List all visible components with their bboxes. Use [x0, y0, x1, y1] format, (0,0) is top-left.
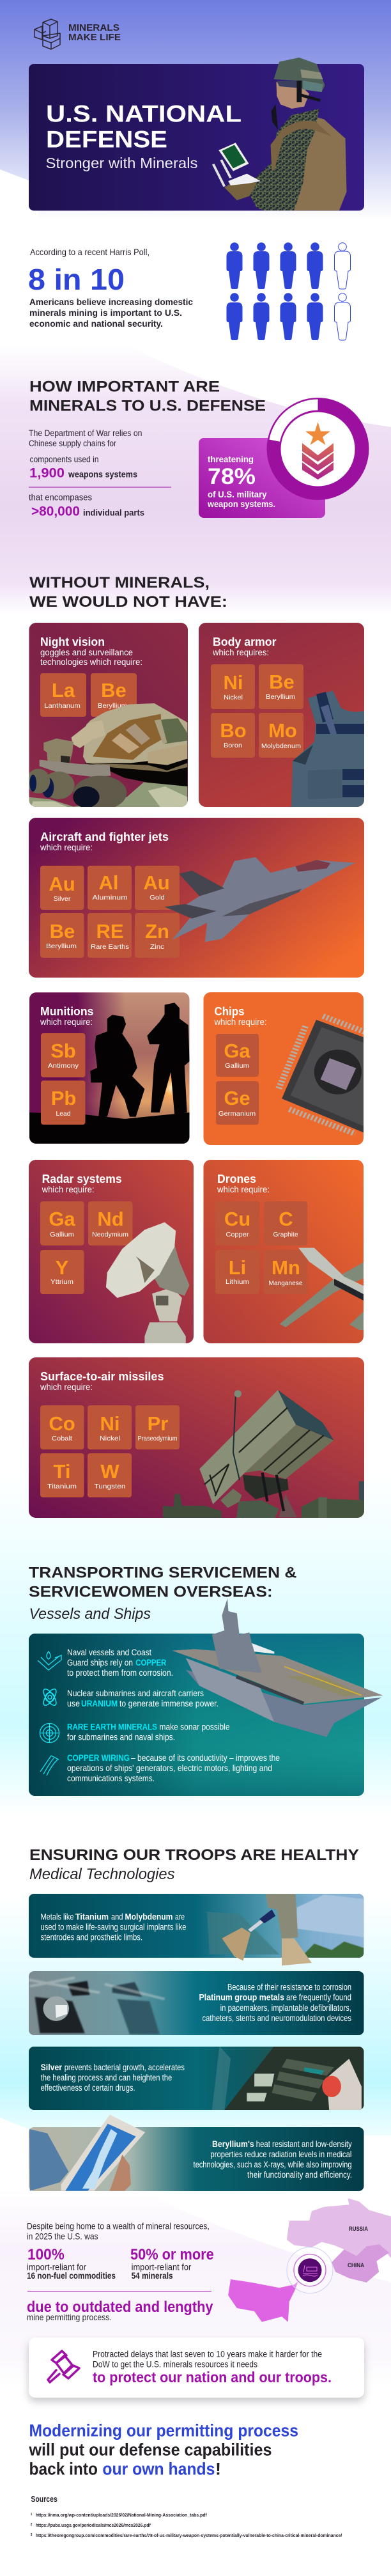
- stat: 100%: import-reliant for: [27, 2263, 86, 2272]
- heading: ensuring troops healthy: [29, 1846, 359, 1883]
- panel: platinum group metals: Platinum group metals: [199, 1993, 284, 2002]
- sources: https://nma.org/wp-content/uploads/2026/02/National-Mining-Association_tabs.pdf: [36, 2513, 207, 2518]
- photo: fighter jet: [165, 857, 355, 942]
- element: Li: Lithium: [226, 1278, 249, 1286]
- element: W: [88, 1453, 132, 1497]
- callout: protracted delays: Protracted delays that last seven to 10 years make it harder for the: [93, 2350, 322, 2359]
- text block: supply chain stats: 1,900: [29, 466, 65, 481]
- text block: supply chain stats: that encompases: [29, 493, 92, 503]
- panel: night vision: goggles and surveillance: [40, 648, 133, 657]
- page background: white wedge: [0, 169, 38, 221]
- stat: 50% or more: 54 minerals: [132, 2270, 173, 2281]
- text block: supply chain stats: Chinese supply chains for: [29, 439, 116, 448]
- heading: without minerals: [29, 574, 227, 611]
- panel: silver: the healing process and can heighten the: [41, 2073, 172, 2082]
- item: copper wiring: communications systems.: [67, 1774, 155, 1783]
- text block: supply chain stats: [29, 428, 171, 519]
- element: C: [264, 1201, 307, 1245]
- element: W: W: [100, 1460, 119, 1483]
- heading: how important: [29, 379, 266, 415]
- element: Cu: Copper: [226, 1231, 249, 1238]
- stat: 8 in 10: 8 in 10: [28, 263, 125, 296]
- panel: hero: DEFENSE: [46, 127, 167, 153]
- element: Mn: [264, 1250, 307, 1294]
- element: Nd: Neodymium: [92, 1231, 128, 1238]
- panel: hero: [29, 58, 364, 211]
- element: Ga: Ga: [224, 1040, 250, 1062]
- soldier with drone controller: [213, 58, 347, 210]
- stat: 50% or more: import-reliant for: [132, 2263, 192, 2272]
- sources: 3: [31, 2533, 33, 2537]
- text block: Harris Poll: economic and national security.: [29, 318, 163, 329]
- element: Ti: [40, 1453, 84, 1497]
- closing statement: !: [215, 2460, 221, 2479]
- element: Ni: [88, 1405, 132, 1449]
- icon: chevrons: [302, 443, 334, 480]
- element: RE: RE: [96, 920, 124, 942]
- panel: titanium and molybdenum: used to make life-saving surgical implants like: [41, 1923, 187, 1932]
- panel: surface-to-air missiles: [29, 1357, 365, 1518]
- panel: titanium and molybdenum: and: [111, 1912, 123, 1922]
- element: Ni: [211, 664, 255, 709]
- element: Be: [259, 664, 303, 709]
- item: rare earths: RARE EARTH MINERALS: [67, 1722, 157, 1732]
- stat: 50% or more: [130, 2246, 214, 2281]
- sources: 2: [31, 2523, 33, 2527]
- panel: night vision: Night vision: [40, 636, 105, 648]
- heading: transporting servicemen: SERVICEWOMEN OVERSEAS:: [29, 1584, 273, 1601]
- panel: body armor: which requires:: [212, 648, 269, 657]
- icon: gavel: [48, 2351, 79, 2382]
- panel: platinum group metals: Because of their resistance to corrosion: [227, 1983, 351, 1992]
- element: Au gold: Gold: [150, 894, 165, 902]
- heading: ensuring troops healthy: ENSURING OUR TROOPS ARE HEALTHY: [29, 1846, 359, 1864]
- sources: 1: [31, 2513, 33, 2517]
- element: Pb: Lead: [56, 1110, 71, 1118]
- stat: 100%: 100%: [27, 2246, 65, 2263]
- element: Au silver: Silver: [54, 895, 71, 903]
- element: Be: [91, 673, 137, 717]
- panel: drones: Drones: [217, 1173, 256, 1185]
- element: Ni: Nickel: [100, 1435, 120, 1442]
- text block: Harris Poll: minerals mining is important to U.S.: [29, 308, 182, 318]
- subtitle: Stronger with Minerals: [46, 155, 198, 171]
- element: Pb: Pb: [51, 1087, 76, 1109]
- panel: chips: [203, 992, 367, 1145]
- element: Ga: Ga: [49, 1208, 75, 1230]
- callout: threatening 78%: 78%: [208, 464, 256, 489]
- item: copper: [38, 1648, 173, 1678]
- poll statement: Americans believe increasing domestic: [29, 297, 193, 307]
- element: Pr: [135, 1405, 180, 1449]
- heading: transporting servicemen: [29, 1565, 296, 1623]
- element: Ga: [40, 1201, 84, 1245]
- panel: aircraft and fighter jets: [29, 818, 364, 978]
- item: rare earths: for submarines and naval ships.: [67, 1733, 175, 1742]
- element: Y: [40, 1250, 84, 1294]
- element: Mo: Molybdenum: [261, 742, 301, 750]
- panel: silver: Silver: [41, 2063, 63, 2072]
- element: Bo: Boron: [224, 742, 242, 749]
- item: uranium: [41, 1687, 218, 1708]
- photo: radar dish: [106, 1222, 190, 1343]
- callout: threatening 78%: [199, 438, 325, 518]
- logo: MAKE LIFE: [68, 32, 121, 43]
- element: C: Graphite: [273, 1231, 298, 1238]
- photo: chest x-ray with pacemaker: [29, 1978, 165, 2034]
- element: Sb: Antimony: [48, 1062, 79, 1070]
- element: Be: Be: [101, 679, 126, 701]
- closing statement: will put our defense capabilities: [29, 2440, 272, 2460]
- panel: body armor: Body armor: [213, 636, 276, 648]
- element: Sb: Sb: [50, 1040, 76, 1062]
- element: W: Tungsten: [95, 1483, 126, 1490]
- title: U.S. NATIONAL: [46, 101, 241, 127]
- panel: radar systems: Radar systems: [42, 1173, 122, 1185]
- stat: 50% or more: 50% or more: [130, 2246, 214, 2263]
- text block: import reliance: Despite being home to a wealth of mineral resources,: [27, 2222, 210, 2231]
- element: Ge: [216, 1081, 259, 1125]
- photo: drone: [280, 1248, 367, 1330]
- element: Co: Co: [49, 1412, 75, 1435]
- element: Mn: Manganese: [268, 1279, 303, 1287]
- item: uranium: to generate immense power.: [119, 1699, 218, 1708]
- item: copper: COPPER: [135, 1658, 167, 1667]
- item: rare earths: make sonar possible: [160, 1722, 230, 1732]
- donut chart: 78 percent with rank insignia: [267, 398, 369, 500]
- label: Russia: RUSSIA: [349, 2226, 368, 2232]
- element: Ga: Gallium: [50, 1231, 74, 1238]
- panel: silver: [29, 2046, 364, 2110]
- element: Au gold: Au: [143, 871, 170, 894]
- text block: supply chain stats: components used in: [29, 455, 98, 464]
- logo text: MINERALS: [68, 22, 119, 33]
- panel: chips: Chips: [215, 1005, 244, 1018]
- callout: threatening 78%: of U.S. military: [208, 489, 267, 499]
- heading: transporting servicemen: TRANSPORTING SERVICEMEN &: [29, 1565, 296, 1582]
- callout: protracted delays: to protect our nation and our troops.: [93, 2369, 332, 2385]
- heading: without minerals: WE WOULD NOT HAVE:: [29, 593, 227, 611]
- element: Y: Y: [56, 1256, 69, 1279]
- heading: how important: MINERALS TO U.S. DEFENSE: [29, 398, 266, 415]
- panel: night vision: technologies which require:: [40, 657, 142, 667]
- element: Bo: [211, 713, 255, 758]
- item: copper wiring: COPPER WIRING: [67, 1753, 130, 1763]
- element: Al: Aluminum: [92, 894, 128, 902]
- item: copper wiring: – because of its conductivity – improves the: [131, 1753, 280, 1763]
- photo: sunset silhouettes: [29, 992, 191, 1144]
- subheading: Medical Technologies: [29, 1866, 175, 1883]
- item: copper: Guard ships rely on: [67, 1658, 133, 1667]
- element: Li: Li: [229, 1256, 246, 1279]
- panel: titanium and molybdenum: Molybdenum: [125, 1912, 172, 1922]
- page background: purple section: [0, 345, 391, 615]
- callout: threatening 78%: weapon systems.: [207, 499, 275, 509]
- element: Au silver: Au: [49, 873, 75, 895]
- text block: supply chain stats: individual parts: [83, 508, 144, 518]
- label: China: CHINA: [348, 2262, 364, 2268]
- world map: shipping from Russia and China to the U.S.: [228, 2198, 391, 2322]
- element: Zn: [135, 913, 180, 958]
- panel: platinum group metals: catheters, stents and neuromodulation devices: [202, 2013, 351, 2023]
- icon: sonar: [40, 1724, 59, 1743]
- element: Ge: Ge: [224, 1087, 250, 1109]
- icon: cargo ship marker: [287, 2247, 333, 2293]
- panel: platinum group metals: in pacemakers, implantable defibrillators,: [220, 2003, 351, 2013]
- sources: https://theoregongroup.com/commodities/rare-earths/78-of-us-military-weapon-systems-potentially-vulnerable-to-china-critical-mineral-dominance/: [36, 2534, 342, 2538]
- closing statement: Modernizing our permitting process: [29, 2421, 298, 2440]
- element: Be: Be: [269, 671, 295, 693]
- element: Nd: Nd: [97, 1208, 124, 1230]
- element: Mn: Mn: [272, 1256, 300, 1279]
- map shapes: [228, 2198, 391, 2322]
- element: Zn: Zinc: [150, 943, 164, 951]
- element: Ni: Ni: [224, 671, 243, 694]
- panel: platinum group metals: [29, 1971, 364, 2035]
- element: Pr: Praseodymium: [138, 1435, 178, 1442]
- element: Y: Yttrium: [50, 1278, 73, 1286]
- photo: missile launcher: [163, 1390, 365, 1518]
- closing statement: our own hands: [102, 2460, 215, 2479]
- page background: white curve: [0, 320, 391, 427]
- element: Sb: [41, 1033, 86, 1077]
- panel: munitions: Munitions: [40, 1005, 93, 1018]
- panel: radar systems: [29, 1160, 194, 1343]
- element: C: C: [279, 1208, 293, 1230]
- element: Ga: [216, 1034, 259, 1077]
- text block: import reliance: in 2025 the U.S. was: [27, 2232, 98, 2242]
- panel: titanium and molybdenum: stentrodes and prosthetic limbs.: [41, 1933, 142, 1942]
- text block: Harris Poll: [28, 247, 193, 329]
- element: Ga: Gallium: [225, 1062, 249, 1070]
- panel: vessels and ships: [29, 1598, 383, 1796]
- text block: supply chain stats: The Department of War relies on: [29, 428, 142, 438]
- closing statement: [29, 2421, 298, 2479]
- text block: import reliance: mine permitting process.: [27, 2313, 112, 2322]
- element: Be: Beryllium: [266, 693, 295, 701]
- element: Ti: Titanium: [47, 1483, 77, 1490]
- item: copper: Naval vessels and Coast: [67, 1648, 151, 1657]
- photo: microchip: [278, 1016, 367, 1134]
- page background: lilac section: [0, 2190, 391, 2385]
- panel: munitions: [29, 992, 191, 1144]
- panel: beryllium: [29, 2114, 364, 2191]
- panel: platinum group metals: are frequently found: [286, 1993, 351, 2002]
- element: Ti: Ti: [54, 1460, 70, 1483]
- panel: radar systems: which require:: [42, 1185, 95, 1194]
- panel: chips: which require:: [214, 1017, 267, 1027]
- element: RE: [88, 913, 132, 958]
- icon: star: [305, 422, 330, 445]
- element: Nd: [88, 1201, 133, 1245]
- photo: amphibious assault ship: [172, 1598, 383, 1737]
- page background: top blue gradient: [0, 0, 391, 221]
- panel: munitions: which require:: [40, 1017, 93, 1027]
- text block: supply chain stats: weapons systems: [68, 469, 137, 480]
- element: Be: [40, 913, 84, 958]
- sources: Sources: [31, 2494, 57, 2504]
- item: copper wiring: operations of ships' generators, electric motors, lighting and: [67, 1763, 272, 1773]
- element: Al: [88, 866, 132, 910]
- item: rare earths: [40, 1722, 230, 1743]
- panel: beryllium: Beryllium's: [212, 2139, 254, 2149]
- photo: tablet with x-ray: [29, 2114, 145, 2191]
- callout: protracted delays: DoW to get the U.S. minerals resources it needs: [93, 2360, 257, 2369]
- icon: atom: [41, 1687, 59, 1707]
- element: La: [40, 673, 86, 717]
- element: Pr: Pr: [148, 1412, 168, 1435]
- callout: protracted delays: [29, 2338, 364, 2398]
- element: La: Lanthanum: [44, 702, 80, 710]
- item: uranium: Nuclear submarines and aircraft carriers: [67, 1689, 204, 1698]
- closing statement: back into: [29, 2460, 98, 2479]
- panel: titanium and molybdenum: are: [175, 1912, 185, 1922]
- icon: mineral cubes: [34, 19, 60, 49]
- element: Co: [40, 1405, 84, 1449]
- callout: threatening 78%: threatening: [208, 454, 254, 464]
- heading: without minerals: WITHOUT MINERALS,: [29, 574, 210, 591]
- panel: surface-to-air missiles: Surface-to-air missiles: [40, 1370, 164, 1383]
- text block: supply chain stats: >80,000: [31, 504, 80, 519]
- element: Be: Beryllium: [98, 702, 127, 710]
- panel: silver: prevents bacterial growth, accelerates: [65, 2063, 185, 2072]
- icon group: 8 of 10 people: [226, 242, 350, 340]
- item: uranium: URANIUM: [81, 1699, 118, 1708]
- element: RE: Rare Earths: [91, 943, 129, 951]
- stat: 100%: 16 non-fuel commodities: [27, 2270, 116, 2281]
- panel: surface-to-air missiles: which require:: [40, 1382, 93, 1392]
- logo: [34, 19, 121, 49]
- element: Ni: Ni: [100, 1412, 120, 1435]
- panel: silver: effectiveness of certain drugs.: [41, 2083, 135, 2093]
- panel: aircraft and fighter jets: Aircraft and fighter jets: [40, 831, 169, 843]
- panel: beryllium: properties reduce radiation levels in medical: [210, 2150, 351, 2159]
- photo: armor vest: [291, 691, 364, 807]
- element: Mo: [259, 713, 303, 758]
- heading: how important: HOW IMPORTANT ARE: [29, 379, 220, 396]
- sources: https://pubs.usgs.gov/periodicals/mcs2026/mcs2026.pdf: [36, 2524, 151, 2528]
- page background: cyan section: [0, 1471, 391, 2135]
- element: Be: Beryllium: [46, 942, 77, 950]
- panel: aircraft and fighter jets: which require:: [40, 843, 93, 852]
- element: Cu: Cu: [224, 1208, 250, 1230]
- panel: night vision: [27, 623, 188, 810]
- panel: beryllium: technologies, such as X-rays, while also improving: [193, 2160, 351, 2169]
- panel: titanium and molybdenum: Metals like: [41, 1912, 74, 1922]
- element: Mo: Mo: [268, 719, 297, 742]
- photo: helmet and night vision goggles: [27, 703, 187, 810]
- panel: titanium and molybdenum: [29, 1894, 364, 1965]
- stat: 100%: [27, 2246, 116, 2281]
- item: copper: to protect them from corrosion.: [67, 1668, 173, 1678]
- element: Bo: Bo: [220, 719, 247, 742]
- panel: beryllium: their functionality and efficiency.: [247, 2170, 352, 2180]
- photo: medical kit: [212, 2046, 364, 2110]
- element: Pb: [41, 1081, 86, 1125]
- element: Cu: [215, 1201, 259, 1245]
- item: copper wiring: [40, 1753, 280, 1783]
- item: uranium: use: [67, 1699, 80, 1708]
- photo: soldier prosthetic leg: [207, 1894, 364, 1965]
- element: La: La: [52, 679, 75, 701]
- element: Li: [215, 1250, 259, 1294]
- text block: import reliance: due to outdated and lengthy: [27, 2299, 213, 2316]
- text block: import reliance: [27, 2222, 214, 2322]
- panel: drones: which require:: [217, 1185, 270, 1194]
- panel: beryllium: heat resistant and low-density: [256, 2139, 352, 2149]
- element: Au gold: [135, 866, 180, 910]
- element: Ni: Nickel: [224, 694, 243, 701]
- subheading: Vessels and Ships: [29, 1605, 151, 1623]
- page background: lower white wedge: [0, 2118, 391, 2199]
- element: Zn: Zn: [145, 920, 169, 942]
- element: Ge: Germanium: [218, 1110, 256, 1118]
- element: Be: Be: [50, 920, 75, 942]
- panel: drones: [203, 1160, 367, 1343]
- sources: [31, 2494, 342, 2538]
- element: Co: Cobalt: [52, 1435, 72, 1442]
- hero background: [29, 64, 364, 211]
- icon: corrosion protection: [38, 1651, 61, 1670]
- poll intro: According to a recent Harris Poll,: [30, 247, 150, 257]
- panel: body armor: [199, 623, 364, 807]
- icon: wires: [40, 1756, 59, 1776]
- element: Al: Al: [98, 871, 119, 894]
- element: Au silver: [40, 866, 84, 910]
- panel: titanium and molybdenum: Titanium: [75, 1912, 109, 1922]
- page background: white curve over lilac: [141, 2190, 391, 2283]
